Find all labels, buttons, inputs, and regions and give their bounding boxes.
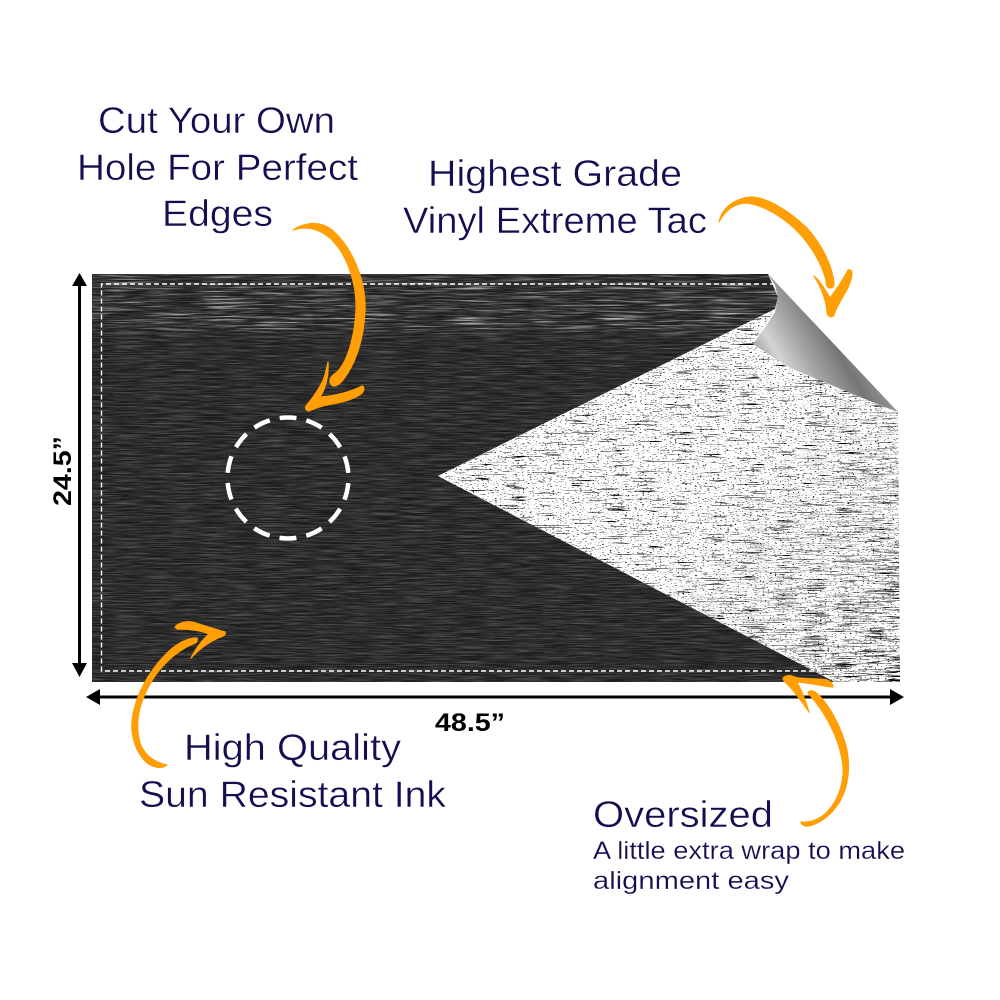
heading: sun resistant ink: High Quality — [184, 727, 402, 768]
arrow: to oversized edge — [783, 676, 849, 826]
dimension label: height: 24.5” — [49, 436, 77, 506]
dashed circular hole — [228, 418, 348, 538]
panel: wrap graphic — [92, 274, 905, 685]
heading: highest grade vinyl: Vinyl Extreme Tac — [403, 200, 707, 241]
dimension arrow: height — [72, 273, 87, 677]
dimension arrow: width — [86, 689, 904, 705]
black wood area — [92, 274, 842, 682]
heading: cut your own hole: Hole For Perfect — [77, 147, 359, 188]
heading: highest grade vinyl: Highest Grade — [428, 153, 682, 194]
arrow: to ink — [132, 622, 225, 767]
heading: highest grade vinyl — [403, 153, 707, 241]
heading: oversized — [593, 794, 905, 895]
white speckled triangle — [430, 300, 905, 685]
heading: oversized: alignment easy — [593, 867, 790, 895]
peeled corner — [753, 274, 898, 412]
arrow: to top corner — [719, 197, 852, 317]
dashed safe line — [102, 284, 822, 671]
heading: sun resistant ink: Sun Resistant Ink — [139, 774, 447, 815]
heading: oversized: A little extra wrap to make — [593, 837, 905, 865]
arrow: to hole — [293, 223, 365, 411]
heading: cut your own hole: Cut Your Own — [98, 100, 335, 141]
heading: cut your own hole — [77, 100, 359, 234]
heading: oversized: Oversized — [593, 794, 773, 835]
heading: sun resistant ink — [139, 727, 447, 815]
dimension label: width: 48.5” — [435, 709, 505, 737]
heading: cut your own hole: Edges — [162, 193, 273, 234]
